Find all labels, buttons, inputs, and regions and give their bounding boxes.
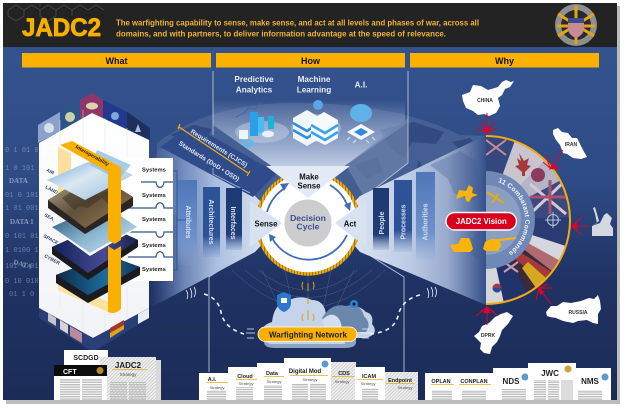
systems labels: Systems xyxy=(142,243,166,249)
bar: Authorities xyxy=(416,172,435,260)
icon: servers xyxy=(291,100,341,146)
doc: JWC: JWC xyxy=(541,369,559,378)
header band xyxy=(3,3,617,47)
how topic labels: Machine xyxy=(298,75,331,84)
requirements and standards band: Standards (DoD • OSD) xyxy=(177,140,240,183)
bar: Authorities: Authorities xyxy=(422,203,430,240)
doc: ICAM xyxy=(355,367,385,400)
threat arrows xyxy=(476,113,589,325)
doc: JADC2 strategy xyxy=(100,357,161,400)
doc: Endpoint: Strategy xyxy=(398,385,412,390)
upper how wedge xyxy=(213,100,405,198)
doc: Data xyxy=(257,363,285,400)
New Zealand xyxy=(499,262,528,301)
JADC2 Vision pill: JADC2 Vision xyxy=(456,217,507,226)
threat: Russia: RUSSIA xyxy=(569,310,588,316)
decision cycle: Act xyxy=(344,220,357,228)
icon: joint staff seal xyxy=(555,4,597,46)
flags base xyxy=(39,308,149,352)
wedge: sense xyxy=(250,201,282,247)
threat: DPRK: DPRK xyxy=(481,333,495,339)
doc: Digital Mod xyxy=(284,358,331,400)
section bar: What xyxy=(22,53,211,68)
standards bracket xyxy=(213,168,250,193)
doc: JADC2 strategy: JADC2 xyxy=(115,361,142,370)
decision cycle: Sense xyxy=(255,220,278,228)
layer: cyber xyxy=(56,255,140,303)
layer: space xyxy=(52,224,138,280)
step labels: Make xyxy=(299,172,319,182)
bar: Interfaces xyxy=(226,188,242,250)
cloud base xyxy=(264,338,356,348)
doc: CDS xyxy=(331,362,356,400)
how frame lines xyxy=(209,71,408,372)
domain labels: SEA xyxy=(43,212,55,223)
doc: Endpoint: Endpoint xyxy=(388,378,412,384)
interoperability band: Interoperability xyxy=(74,144,110,168)
Germany xyxy=(510,250,552,292)
data text background: 01 1 0 xyxy=(9,291,34,299)
shield icon xyxy=(277,292,291,312)
dashed link right xyxy=(361,287,436,338)
doc: NMS xyxy=(576,368,611,400)
Canada xyxy=(502,142,545,186)
bar: People xyxy=(373,188,389,250)
doc: A.I.: A.I. xyxy=(208,377,217,383)
docs: left stack xyxy=(54,350,161,400)
section bar: Why xyxy=(410,53,599,68)
gold outline xyxy=(486,136,570,304)
doc: CONPLAN: CONPLAN xyxy=(460,379,488,385)
decision cycle: Cycle xyxy=(297,222,320,232)
doc: Cloud xyxy=(228,367,258,400)
icon: tank left xyxy=(450,238,473,252)
Australia xyxy=(486,137,514,162)
how topic labels xyxy=(234,75,367,94)
doc: OPLAN: OPLAN xyxy=(431,379,451,385)
systems panel xyxy=(120,158,173,281)
doc: SCDGD: SCDGD xyxy=(73,355,99,362)
doc: Data: Data xyxy=(266,371,279,377)
left prism xyxy=(38,93,186,352)
section bar: How xyxy=(216,53,405,68)
continents xyxy=(170,122,480,192)
doc: CFT: CFT xyxy=(63,369,77,376)
lower wireframe globe xyxy=(232,270,385,306)
systems labels: Systems xyxy=(142,267,166,273)
bar: Architectures: Architectures xyxy=(207,199,214,245)
data text background: 0 10 010 xyxy=(5,278,39,286)
data text background: DATA xyxy=(12,258,33,271)
how topic labels: Predictive xyxy=(234,75,274,84)
decision cycle: Sense xyxy=(298,182,321,190)
section bar: Why: Why xyxy=(495,56,514,66)
domain labels: AIR xyxy=(45,167,56,177)
doc: A.I. xyxy=(199,373,229,400)
icon: aircraft xyxy=(456,185,478,202)
data text background: DATA xyxy=(9,177,28,185)
gold back column xyxy=(58,147,71,200)
requirements and standards band xyxy=(160,124,277,197)
doc: A.I.: Strategy xyxy=(210,385,224,390)
right grey globe panel xyxy=(346,118,408,197)
threat: DPRK xyxy=(474,312,513,354)
decision cycle xyxy=(250,166,366,274)
systems labels: Systems xyxy=(142,217,166,223)
center hub xyxy=(284,200,332,246)
inner half disc xyxy=(486,171,535,269)
JADC2 Vision pill xyxy=(446,212,516,230)
warfighting network xyxy=(258,282,375,348)
United Kingdom xyxy=(530,181,569,218)
doc: NDS xyxy=(493,368,529,400)
section bar: How: How xyxy=(301,56,321,66)
NATO xyxy=(546,218,547,219)
doc: CDS: CDS xyxy=(338,371,350,377)
bar: Attributes xyxy=(177,180,197,265)
requirements and standards band: Requirements (CJCS) xyxy=(189,128,249,169)
domain labels xyxy=(42,167,61,267)
doc: OPLAN xyxy=(425,373,456,400)
systems labels: Systems xyxy=(142,193,166,199)
threat: Iran xyxy=(553,128,587,159)
flag semicircle xyxy=(486,135,571,305)
icon: AI brain chip xyxy=(347,104,375,143)
threat: China: CHINA xyxy=(477,98,493,104)
gold ring xyxy=(257,172,359,274)
dashed link left xyxy=(186,287,255,338)
white body xyxy=(39,113,149,338)
data text background: DATA 1 xyxy=(10,218,34,226)
warfighting network: Warfighting Network xyxy=(269,330,348,340)
right cone xyxy=(335,135,486,305)
bar: Interfaces: Interfaces xyxy=(229,206,236,240)
interoperability band xyxy=(60,141,121,313)
doc: CONPLAN xyxy=(454,373,494,400)
France xyxy=(525,235,565,270)
data text background: 1 0100 1 xyxy=(5,247,39,255)
layer: sea xyxy=(50,202,139,256)
doc: Endpoint xyxy=(385,372,418,400)
icon: analytics bars xyxy=(235,102,289,146)
title: JADC2 xyxy=(22,14,101,42)
data text background xyxy=(5,147,43,299)
doc: CDS: Strategy xyxy=(335,379,349,384)
doc: Digital Mod: Strategy xyxy=(303,377,317,382)
doc: JADC2 strategy: Strategy xyxy=(120,372,137,377)
data text background: 101 0 01 xyxy=(5,263,39,271)
doc: NMS: NMS xyxy=(581,377,600,386)
definition text: domains, and with partners, to deliver information advantage at the speed of relevance. xyxy=(116,30,446,38)
doc: JWC xyxy=(528,363,576,400)
layer: air xyxy=(47,158,133,200)
docs: how strategies xyxy=(199,358,418,400)
cloud xyxy=(261,297,375,344)
Japan xyxy=(520,161,560,197)
left cone xyxy=(150,145,282,308)
bar: Processes xyxy=(394,180,412,252)
signal masts xyxy=(302,282,314,321)
domain labels: LAND xyxy=(44,184,59,196)
threat: Iran: IRAN xyxy=(565,142,577,148)
bar: Attributes: Attributes xyxy=(184,205,191,239)
doc: Cloud: Cloud xyxy=(237,374,253,380)
combatant commands text: 11 Combatant Commands xyxy=(498,178,530,255)
systems labels xyxy=(142,168,166,273)
doc: Cloud: Strategy xyxy=(239,381,253,386)
data text background: 0 1 01 01 xyxy=(5,147,43,155)
section bar: What: What xyxy=(106,56,128,66)
decision cycle: Decision xyxy=(290,213,326,223)
layer: land xyxy=(48,172,133,234)
definition text xyxy=(116,18,479,38)
South Korea xyxy=(486,268,504,303)
threat: China xyxy=(462,80,514,116)
how topic labels: Analytics xyxy=(236,86,273,94)
bar: Processes: Processes xyxy=(400,204,408,240)
threat: Russia xyxy=(546,295,601,324)
icon: tank right xyxy=(483,237,516,251)
icon: satellite xyxy=(487,192,504,203)
systems labels: Systems xyxy=(142,168,166,174)
cycle arrows xyxy=(267,185,348,260)
data text background: 1 01 001 xyxy=(5,205,39,213)
doc: ICAM: Strategy xyxy=(361,381,375,386)
data text background: 01 0 1011 xyxy=(5,192,43,200)
doc: Data: Strategy xyxy=(267,379,281,384)
requirements bracket xyxy=(178,124,250,176)
bar: People: People xyxy=(379,211,386,234)
domain labels: CYBER xyxy=(43,253,61,267)
bar: Architectures xyxy=(203,187,220,257)
right globe overlay xyxy=(430,151,486,260)
pill xyxy=(258,327,357,342)
how topic labels: A.I. xyxy=(355,80,367,90)
doc: ICAM: ICAM xyxy=(362,374,376,380)
globe backdrop xyxy=(157,103,486,215)
data text background: 1 0 101 0 xyxy=(5,165,43,173)
how topic labels: Learning xyxy=(297,86,331,94)
doc: Digital Mod: Digital Mod xyxy=(289,369,321,375)
domain labels: SPACE xyxy=(42,233,60,247)
data text background: 0 101 01 xyxy=(5,233,39,241)
wedge: act xyxy=(335,201,366,247)
wedge: make sense xyxy=(266,166,350,198)
docs: why guidance xyxy=(425,363,611,400)
doc: NDS: NDS xyxy=(503,377,520,386)
puzzle connector lines xyxy=(128,182,173,257)
service icons band xyxy=(38,93,150,143)
definition text: The warfighting capability to sense, make sense, and act at all levels and phases of war, across all xyxy=(116,18,479,28)
hexagon pattern xyxy=(8,3,104,21)
threat: soldier xyxy=(592,207,613,236)
location icon xyxy=(350,300,358,308)
